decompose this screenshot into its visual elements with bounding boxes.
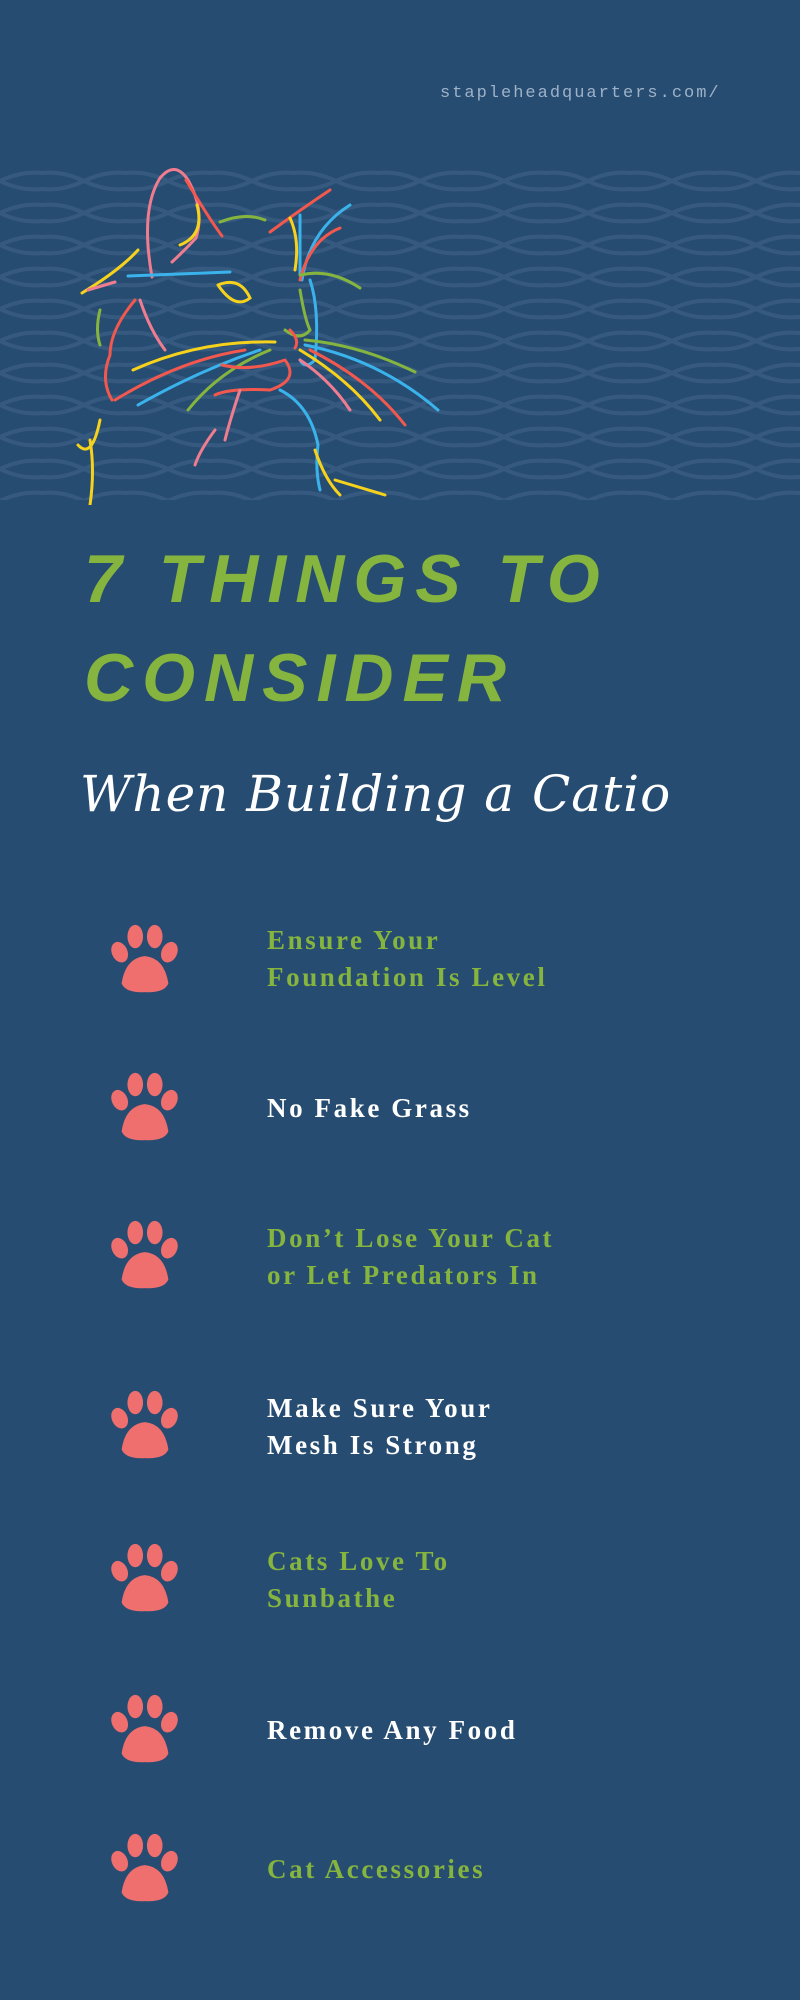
item 5: Cats Love To (267, 1546, 450, 1576)
item 5 (111, 1544, 450, 1613)
item 2: No Fake Grass (267, 1093, 472, 1123)
item 3: or Let Predators In (267, 1260, 540, 1290)
list of items (111, 924, 554, 1902)
item 7: Cat Accessories (267, 1854, 485, 1884)
title: 7 THINGS TO (84, 541, 609, 617)
title line 2: CONSIDER (84, 640, 515, 716)
mesh background pattern with cat illustration (0, 168, 800, 505)
item 1: Foundation Is Level (267, 962, 547, 992)
item 4: Make Sure Your (267, 1393, 492, 1423)
item 3: Don’t Lose Your Cat (267, 1223, 554, 1253)
item 4 (111, 1390, 492, 1460)
item 6: Remove Any Food (267, 1715, 518, 1745)
item 2 (111, 1072, 472, 1140)
icon: cat line art (78, 169, 438, 505)
url: stapleheadquarters.com/ (440, 84, 721, 103)
item 5: Sunbathe (267, 1583, 397, 1613)
item 3 (111, 1220, 554, 1290)
item 4: Mesh Is Strong (267, 1430, 478, 1460)
item 1 (111, 924, 547, 992)
subtitle: When Building a Catio (80, 765, 671, 823)
item 6 (111, 1694, 518, 1762)
item 1: Ensure Your (267, 925, 440, 955)
item 7 (111, 1834, 485, 1902)
